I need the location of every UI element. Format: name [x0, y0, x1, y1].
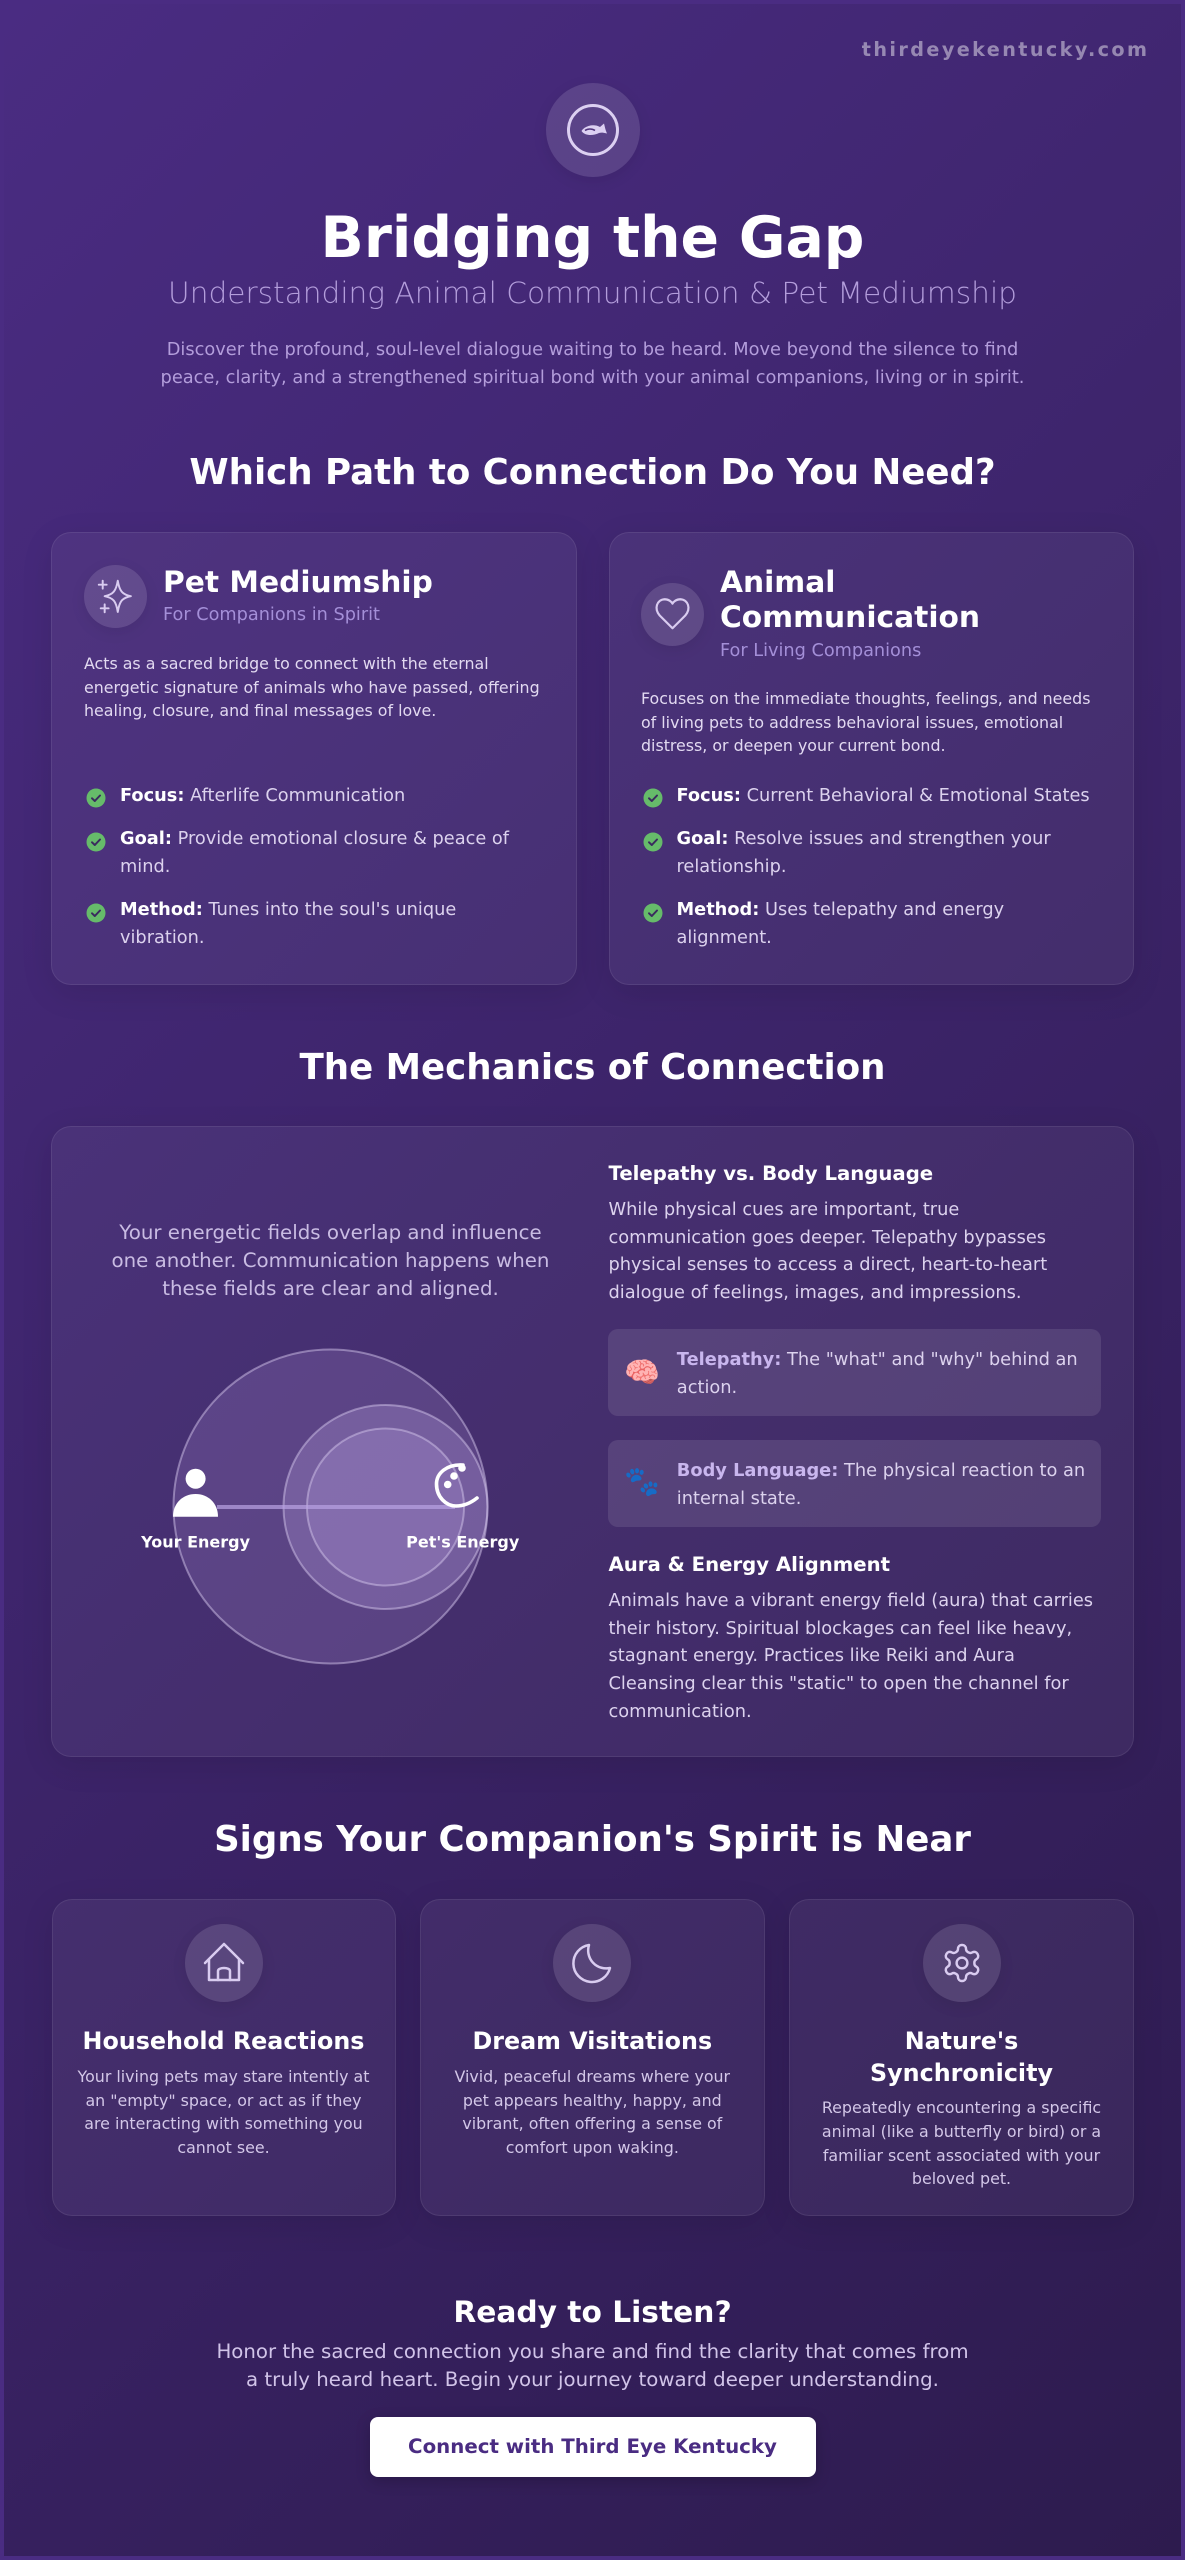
focus item: Focus: Current Behavioral & Emotional States — [676, 786, 1090, 806]
card description: energetic signature of animals who have passed, offering — [84, 678, 540, 696]
heading: mechanics: The Mechanics of Connection — [300, 1047, 885, 1088]
telepathy text — [608, 1199, 1047, 1303]
callout text — [676, 1349, 1078, 1398]
callout text: action. — [677, 1377, 737, 1398]
icon: header fish in ring — [546, 83, 640, 177]
panel: animal communication — [608, 532, 1134, 985]
subtitle: Understanding Animal Communication & Pet Mediumship — [168, 276, 1017, 310]
icon: check method — [86, 904, 106, 922]
callout text: Body Language: The physical reaction to an — [677, 1460, 1085, 1481]
panel: household reactions — [52, 1899, 396, 2216]
card title: Household Reactions — [83, 2027, 364, 2055]
icon: check goal — [86, 832, 106, 852]
heading: which path: Which Path to Connection Do You Need? — [189, 452, 996, 493]
goal item: mind. — [120, 857, 170, 877]
aura text: Animals have a vibrant energy field (aura) that carries — [608, 1590, 1093, 1611]
card text: cannot see. — [177, 2138, 270, 2157]
cta button — [370, 2417, 816, 2477]
aura text: communication. — [608, 1701, 752, 1722]
aura text: stagnant energy. Practices like Reiki and Aura — [608, 1645, 1015, 1666]
card description: healing, closure, and final messages of love. — [84, 701, 436, 720]
goal item: Goal: Resolve issues and strengthen your — [676, 829, 1051, 849]
card description — [84, 654, 540, 720]
energy description: these fields are clear and aligned. — [162, 1277, 499, 1300]
callout: body language — [608, 1440, 1101, 1527]
telepathy text: While physical cues are important, true — [608, 1199, 959, 1220]
energy description — [112, 1221, 549, 1300]
icon: check focus — [644, 788, 662, 808]
cta text: Honor the sacred connection you share and find the clarity that comes from — [216, 2340, 969, 2363]
card text — [822, 2098, 1101, 2188]
icon: house — [184, 1924, 262, 2002]
icon: pet — [436, 1465, 477, 1506]
telepathy text: dialogue of feelings, images, and impressions. — [608, 1282, 1022, 1303]
card text: pet appears healthy, happy, and — [463, 2091, 722, 2110]
telepathy text: communication goes deeper. Telepathy bypasses — [608, 1227, 1046, 1248]
callout text: internal state. — [677, 1488, 801, 1509]
card text: beloved pet. — [912, 2169, 1011, 2188]
intro paragraph: Discover the profound, soul-level dialogue waiting to be heard. Move beyond the silence to find — [167, 338, 1018, 360]
card title: Nature's — [905, 2027, 1018, 2055]
card title: Synchronicity — [870, 2059, 1053, 2087]
callout text — [677, 1460, 1085, 1509]
method item — [120, 900, 456, 948]
callout text: Telepathy: The "what" and "why" behind an — [677, 1349, 1078, 1370]
aura text: Cleansing clear this "static" to open the channel for — [608, 1673, 1069, 1694]
icon: check goal — [644, 832, 662, 852]
card title: Pet Mediumship — [163, 565, 433, 600]
intro paragraph — [161, 338, 1024, 388]
callout: telepathy — [608, 1329, 1101, 1416]
energy description: Your energetic fields overlap and influence — [119, 1221, 542, 1244]
panel: dream visitations — [420, 1899, 765, 2216]
card subtitle: For Living Companions — [720, 640, 921, 660]
cta heading: Ready to Listen? — [453, 2294, 732, 2330]
energy description: one another. Communication happens when — [112, 1249, 549, 1272]
card description: of living pets to address behavioral issues, emotional — [641, 712, 1063, 732]
panel: pet mediumship — [51, 532, 576, 985]
aura heading: Aura & Energy Alignment — [608, 1553, 890, 1576]
card description: distress, or deepen your current bond. — [641, 736, 946, 755]
card title: Communication — [720, 600, 980, 635]
label: pet's energy: Pet's Energy — [406, 1533, 520, 1552]
card subtitle: For Companions in Spirit — [163, 605, 380, 625]
method item: vibration. — [120, 928, 205, 948]
diagram: overlapping energy fields — [140, 1348, 520, 1664]
website watermark: thirdeyekentucky.com — [862, 38, 1149, 61]
telepathy heading: Telepathy vs. Body Language — [608, 1162, 933, 1185]
icon: heart — [641, 583, 704, 646]
card title — [720, 565, 980, 635]
method item: alignment. — [676, 928, 772, 948]
aura text — [608, 1590, 1093, 1722]
goal item — [676, 829, 1051, 877]
goal item — [120, 829, 510, 877]
icon: check method — [644, 904, 662, 922]
icon: sparkles — [84, 565, 147, 628]
telepathy text: physical senses to access a direct, heart-to-heart — [608, 1254, 1047, 1275]
card text: vibrant, often offering a sense of — [462, 2114, 722, 2133]
panel: mechanics of connection — [51, 1126, 1134, 1756]
method item: Method: Uses telepathy and energy — [676, 900, 1004, 920]
card text: Your living pets may stare intently at — [78, 2067, 369, 2086]
heading: signs: Signs Your Companion's Spirit is Near — [214, 1819, 971, 1860]
card description — [641, 689, 1090, 755]
icon: brain: 🧠 — [624, 1356, 660, 1390]
cta button: Connect with Third Eye Kentucky — [408, 2435, 777, 2458]
card title: Dream Visitations — [472, 2027, 712, 2055]
card text: an "empty" space, or act as if they — [85, 2091, 362, 2110]
icon: person — [173, 1469, 218, 1517]
card description: Acts as a sacred bridge to connect with the eternal — [84, 654, 489, 673]
icon: check focus — [86, 788, 106, 808]
method item — [676, 900, 1004, 948]
cta text: a truly heard heart. Begin your journey toward deeper understanding. — [246, 2368, 939, 2391]
method item: Method: Tunes into the soul's unique — [120, 900, 456, 920]
card description: Focuses on the immediate thoughts, feelings, and needs — [641, 689, 1090, 708]
focus item: Focus: Afterlife Communication — [120, 786, 405, 806]
card text: animal (like a butterfly or bird) or a — [822, 2122, 1101, 2141]
aura text: their history. Spiritual blockages can feel like heavy, — [608, 1618, 1072, 1639]
card text: Vivid, peaceful dreams where your — [455, 2067, 730, 2086]
icon: gear — [922, 1924, 1000, 2002]
intro paragraph: peace, clarity, and a strengthened spiritual bond with your animal companions, living or in spirit. — [161, 366, 1024, 388]
label: your energy: Your Energy — [140, 1533, 251, 1552]
card text: comfort upon waking. — [506, 2138, 679, 2157]
icon: moon — [553, 1924, 631, 2002]
card text: are interacting with something you — [84, 2114, 363, 2133]
goal item: Goal: Provide emotional closure & peace of — [120, 829, 509, 849]
card text: familiar scent associated with your — [823, 2146, 1100, 2165]
cta text — [216, 2340, 969, 2391]
title: Bridging the Gap — [321, 205, 864, 271]
card title: Animal — [720, 565, 835, 600]
icon: paw prints: 🐾 — [624, 1465, 660, 1499]
card text — [78, 2067, 370, 2157]
card title — [870, 2027, 1053, 2087]
goal item: relationship. — [676, 857, 786, 877]
card text — [454, 2067, 730, 2157]
card text: Repeatedly encountering a specific — [822, 2098, 1101, 2117]
panel: nature's synchronicity — [789, 1899, 1134, 2216]
